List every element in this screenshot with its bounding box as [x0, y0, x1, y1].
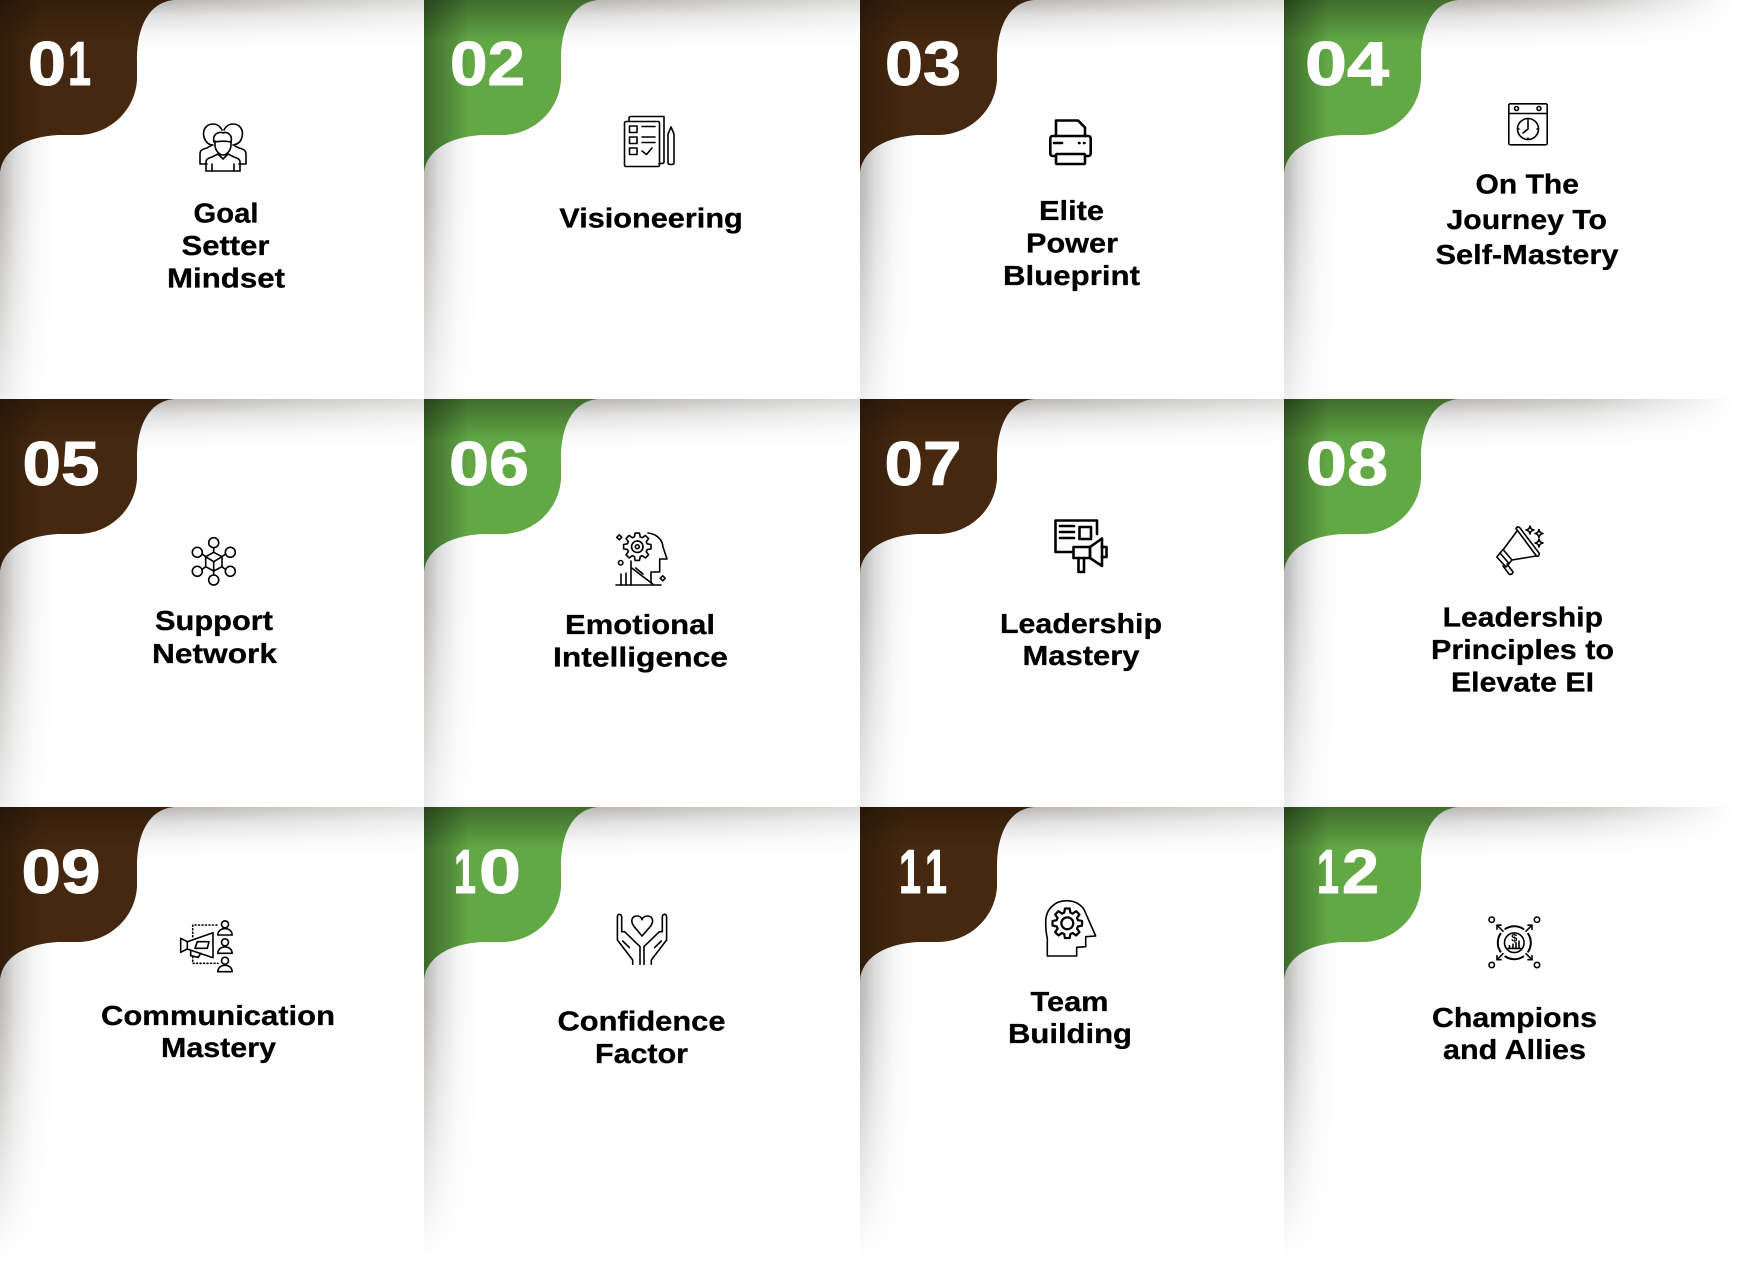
panel: 12 Champions and Allies — [1284, 807, 1712, 1230]
number 09: 09 — [22, 838, 100, 907]
number 05: 05 — [22, 430, 100, 499]
label: Blueprint — [1003, 260, 1140, 291]
number tab — [0, 0, 180, 175]
label: Mastery — [1022, 640, 1140, 671]
label — [1432, 1002, 1597, 1065]
panel: 04 On The Journey To Self-Mastery — [1284, 0, 1744, 399]
icon: head with gear — [616, 533, 667, 585]
number tab — [860, 807, 1040, 982]
label: Self-Mastery — [1436, 239, 1619, 270]
panel: 03 Elite Power Blueprint — [860, 0, 1284, 399]
number 04: 04 — [1305, 30, 1390, 99]
label — [1008, 986, 1132, 1049]
panel: 01 Goal Setter Mindset — [0, 0, 424, 399]
label: and Allies — [1443, 1034, 1586, 1065]
label: Emotional — [565, 609, 715, 640]
label: Confidence — [558, 1006, 726, 1036]
label — [1003, 195, 1140, 291]
number 10 — [454, 838, 521, 907]
panel: 08 Leadership Principles to Elevate EI — [1284, 399, 1744, 807]
icon: megaphone with sparkles — [1497, 526, 1543, 574]
panel: 10 Confidence Factor — [424, 807, 860, 1267]
label — [553, 609, 728, 672]
number 06: 06 — [449, 430, 529, 499]
number tab — [860, 399, 1040, 574]
number tab — [860, 0, 1040, 175]
number 11: 1 — [899, 838, 921, 907]
label: Mindset — [167, 262, 285, 294]
label: Building — [1008, 1018, 1132, 1049]
panel: 06 Emotional Intelligence — [424, 399, 860, 807]
number 11: 1 — [925, 838, 947, 907]
icon: network cube — [192, 538, 235, 585]
number 02: 02 — [450, 30, 525, 99]
icon: board and megaphone — [1056, 520, 1106, 572]
number 10: 1 — [454, 838, 476, 907]
icon: printer — [1050, 120, 1091, 164]
label — [167, 198, 285, 294]
label — [101, 1000, 335, 1063]
label: Elite — [1039, 195, 1104, 226]
number tab — [0, 807, 180, 982]
label — [1436, 168, 1619, 270]
label — [1000, 608, 1162, 671]
label — [1431, 602, 1614, 698]
label: Intelligence — [553, 642, 728, 672]
number 10: 0 — [479, 838, 521, 907]
number 08: 08 — [1306, 430, 1388, 499]
number tab — [424, 0, 604, 175]
number 03: 03 — [885, 30, 961, 99]
label: Leadership — [1443, 602, 1603, 633]
label — [558, 1006, 726, 1069]
label: Principles to — [1431, 634, 1614, 665]
icon: three people — [200, 124, 246, 171]
panel: 09 Communication Mastery — [0, 807, 424, 1267]
number tab — [424, 807, 604, 982]
label: Goal — [194, 198, 258, 228]
number 12: 1 — [1317, 838, 1339, 907]
label: Team — [1030, 986, 1108, 1017]
panel: 11 Team Building — [860, 807, 1284, 1267]
icon: target with dollar and arrows — [1489, 917, 1540, 968]
label: Setter — [182, 230, 270, 261]
number 01 — [28, 30, 91, 99]
number 01: 1 — [68, 30, 91, 99]
label: On The — [1476, 168, 1579, 200]
icon: calendar clock — [1509, 104, 1547, 145]
label: Elevate EI — [1451, 667, 1594, 698]
label: Communication — [101, 1000, 335, 1031]
number 07: 07 — [884, 430, 962, 499]
label: Network — [152, 638, 277, 669]
icon: target with dollar and arrows: $ — [1511, 933, 1517, 945]
number tab — [1284, 807, 1464, 982]
panel: 07 Leadership Mastery — [860, 399, 1284, 807]
label: Leadership — [1000, 608, 1162, 639]
number tab — [0, 399, 180, 574]
label — [152, 605, 277, 669]
panel: 02 Visioneering — [424, 0, 860, 399]
number 01: 0 — [28, 30, 66, 99]
panel: 05 Support Network — [0, 399, 424, 807]
number tab — [1284, 399, 1464, 574]
icon: checklist and pencil — [624, 116, 674, 166]
icon: megaphone and audience — [181, 921, 232, 972]
label: Support — [155, 605, 273, 636]
number tab — [1284, 0, 1464, 175]
icon: head with gear — [1046, 901, 1096, 956]
icon: hands holding heart — [617, 914, 667, 964]
number 12 — [1317, 838, 1379, 907]
label: Factor — [595, 1038, 688, 1069]
number tab — [424, 399, 604, 574]
label: Mastery — [161, 1032, 276, 1063]
label: Power — [1026, 228, 1118, 258]
label: Journey To — [1446, 204, 1607, 235]
number 12: 2 — [1342, 838, 1379, 907]
label: Visioneering — [559, 202, 743, 234]
label: Champions — [1432, 1002, 1597, 1033]
